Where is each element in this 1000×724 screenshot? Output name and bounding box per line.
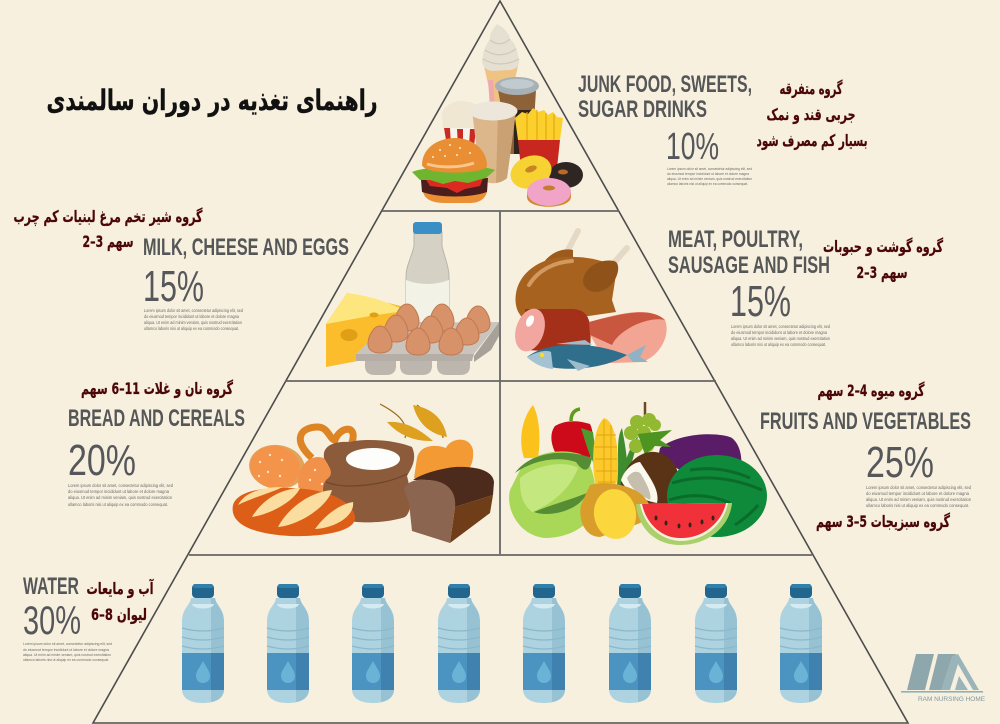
text block: water: ullamco laboris nisi ut aliquip ex ea commodo consequat.	[23, 657, 109, 662]
text block: water: do eiusmod tempor incididunt ut labore et dolore magna	[23, 647, 110, 652]
persian note: junk food: جربی قند و نمک	[766, 105, 856, 124]
illustration: fruits and vegetables	[509, 402, 767, 545]
text block: water: WATER	[23, 573, 79, 600]
text block: milk, cheese and eggs: ullamco laboris nisi ut aliquip ex ea commodo consequat.	[144, 326, 239, 331]
text block: meat, poultry and fish: do eiusmod tempor incididunt ut labore et dolore magna	[731, 330, 827, 335]
persian note: meat group	[823, 237, 943, 282]
logo: ram nursing home	[901, 654, 986, 703]
text block: meat, poultry and fish: 15%	[730, 277, 791, 326]
persian note: junk food: گروه متفرقه	[780, 79, 843, 98]
text block: fruits and vegetables	[760, 408, 972, 508]
illustration: meat, poultry and fish	[510, 231, 667, 371]
text block: milk, cheese and eggs: Lorem ipsum dolor sit amet, consectetur adipiscing elit, sed	[144, 308, 243, 313]
persian note: vegetable group: گروه سبزیجات 5–3 سهم	[816, 512, 950, 531]
logo: ram nursing home: RAM NURSING HOME	[918, 696, 986, 703]
text block: meat, poultry and fish: SAUSAGE AND FISH	[668, 252, 830, 279]
text block: junk food: 10%	[666, 126, 719, 168]
text block: milk, cheese and eggs: do eiusmod tempor incididunt ut labore et dolore magna	[144, 314, 239, 319]
persian note: bread group: گروه نان و غلات 11–6 سهم	[81, 379, 233, 398]
text block: fruits and vegetables: Lorem ipsum dolor sit amet, consectetur adipiscing elit, sed	[866, 485, 972, 490]
title: راهنمای تغذیه در دوران سالمندی	[46, 84, 378, 117]
text block: meat, poultry and fish: aliqua. Ut enim ad minim veniam, quis nostrud exercitation	[731, 336, 830, 341]
persian note: water	[86, 578, 154, 624]
illustration: junk food	[412, 24, 583, 207]
illustration: water bottles	[182, 584, 822, 703]
persian note: meat group: گروه گوشت و حبوبات	[823, 237, 943, 256]
illustration: milk, cheese and eggs	[326, 222, 499, 375]
text block: milk, cheese and eggs: 15%	[143, 262, 204, 311]
text block: junk food: SUGAR DRINKS	[578, 96, 707, 123]
text block: fruits and vegetables: aliqua. Ut enim ad minim veniam, quis nostrud exercitation	[866, 497, 972, 502]
text block: milk, cheese and eggs: MILK, CHEESE AND EGGS	[143, 234, 349, 261]
persian note: milk group: گروه شیر تخم مرغ لبنیات کم چرب	[14, 207, 203, 227]
text block: junk food: aliqua. Ut enim ad minim veniam, quis nostrud exercitation	[667, 177, 752, 181]
persian note: milk group	[14, 207, 203, 251]
text block: meat, poultry and fish: MEAT, POULTRY,	[668, 226, 803, 253]
text block: bread and cereals: 20%	[68, 436, 136, 485]
persian note: junk food	[756, 79, 868, 150]
text block: junk food: do eiusmod tempor incididunt ut labore et dolore magna	[667, 172, 750, 176]
persian note: water: لیوان 8–6	[91, 605, 147, 624]
persian note: water: آب و مایعات	[86, 578, 154, 598]
illustration: bread and cereals	[233, 404, 494, 543]
text block: junk food: Lorem ipsum dolor sit amet, consectetur adipiscing elit, sed	[667, 167, 752, 171]
text block: water	[23, 573, 112, 662]
text block: fruits and vegetables: ullamco laboris nisi ut aliquip ex ea commodo consequat.	[866, 503, 969, 508]
text block: bread and cereals: BREAD AND CEREALS	[68, 405, 245, 432]
text block: meat, poultry and fish	[668, 226, 830, 347]
text block: water: aliqua. Ut enim ad minim veniam, quis nostrud exercitation	[23, 652, 111, 657]
persian note: milk group: سهم 3–2	[82, 232, 134, 251]
text block: meat, poultry and fish: Lorem ipsum dolor sit amet, consectetur adipiscing elit, sed	[731, 324, 830, 329]
text block: water: Lorem ipsum dolor sit amet, consectetur adipiscing elit, sed	[23, 641, 112, 646]
text block: fruits and vegetables: do eiusmod tempor incididunt ut labore et dolore magna	[866, 491, 970, 496]
text block: junk food: ullamco laboris nisi ut aliquip ex ea commodo consequat.	[667, 182, 748, 186]
text block: milk, cheese and eggs	[143, 234, 349, 331]
text block: bread and cereals: do eiusmod tempor incididunt ut labore et dolore magna	[68, 489, 170, 494]
text block: junk food: JUNK FOOD, SWEETS,	[578, 71, 752, 98]
text block: junk food	[578, 71, 752, 186]
text block: bread and cereals: Lorem ipsum dolor sit amet, consectetur adipiscing elit, sed	[68, 483, 174, 488]
persian note: junk food: بسیار کم مصرف شود	[756, 131, 868, 150]
persian note: meat group: سهم 3–2	[856, 263, 908, 282]
text block: bread and cereals: ullamco laboris nisi ut aliquip ex ea commodo consequat.	[68, 502, 168, 507]
text block: meat, poultry and fish: ullamco laboris nisi ut aliquip ex ea commodo consequat.	[731, 342, 826, 347]
text block: fruits and vegetables: 25%	[866, 438, 934, 487]
text block: bread and cereals	[68, 405, 245, 507]
text block: milk, cheese and eggs: aliqua. Ut enim ad minim veniam, quis nostrud exercitation	[144, 320, 242, 325]
text block: water: 30%	[23, 599, 81, 643]
text block: bread and cereals: aliqua. Ut enim ad minim veniam, quis nostrud exercitation	[68, 495, 172, 500]
persian note: fruit group: گروه میوه 4–2 سهم	[818, 381, 925, 400]
